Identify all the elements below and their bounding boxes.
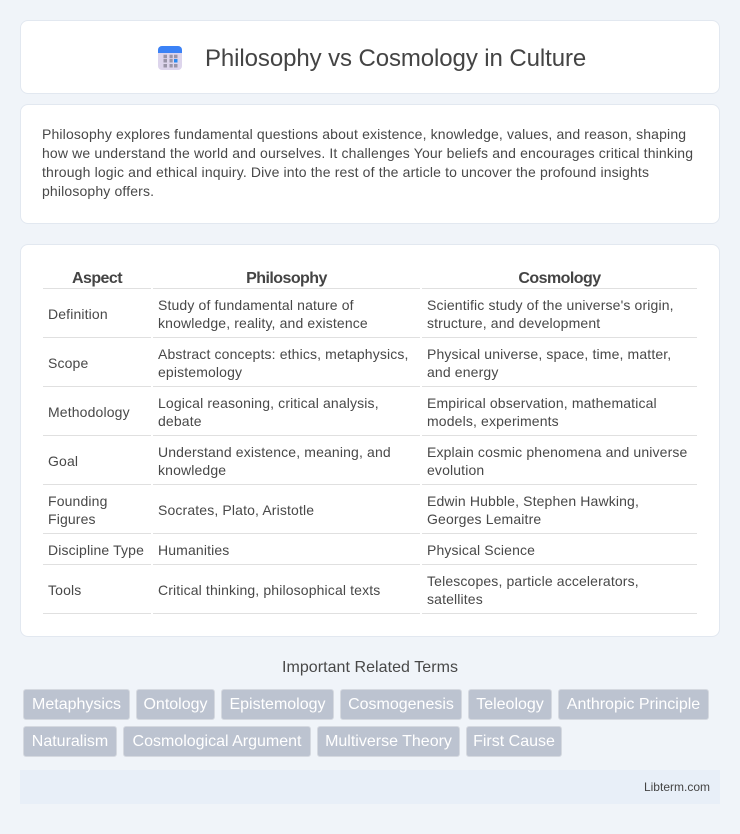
row: Tools: Tools	[48, 582, 81, 598]
tag: Cosmogenesis: Cosmogenesis	[348, 696, 454, 713]
table card	[20, 244, 720, 637]
row: Methodology: Methodology	[48, 404, 130, 420]
tag: First Cause: First Cause	[473, 733, 555, 750]
tag: Naturalism	[23, 726, 117, 757]
table header row: Philosophy	[246, 270, 327, 287]
tag: Epistemology	[221, 689, 334, 720]
row: Founding Figures: Georges Lemaitre	[427, 511, 541, 527]
comparison table	[43, 270, 697, 614]
table header row	[43, 270, 697, 289]
row: Methodology: Logical reasoning, critical analysis,	[158, 395, 379, 411]
header card	[20, 20, 720, 94]
tag: Ontology: Ontology	[143, 696, 208, 713]
row: Methodology	[43, 395, 697, 436]
tag: Ontology	[136, 689, 215, 720]
tag: Epistemology: Epistemology	[229, 696, 326, 713]
intro card	[20, 104, 720, 224]
row: Goal: evolution	[427, 462, 484, 478]
row: Tools	[43, 573, 697, 614]
intro text	[42, 126, 693, 199]
tag: Cosmological Argument	[123, 726, 311, 757]
tag: Metaphysics	[23, 689, 130, 720]
row: Scope: Abstract concepts: ethics, metaphysics,	[158, 346, 409, 362]
row: Methodology: models, experiments	[427, 413, 559, 429]
table header row: Aspect	[72, 270, 122, 287]
tag: Anthropic Principle	[558, 689, 709, 720]
intro text: Philosophy explores fundamental questions about existence, knowledge, values, and reason, shaping	[42, 126, 686, 142]
row: Founding Figures: Edwin Hubble, Stephen Hawking,	[427, 493, 639, 509]
row: Founding Figures: Figures	[48, 511, 96, 527]
row: Founding Figures	[43, 493, 697, 534]
row: Methodology: debate	[158, 413, 202, 429]
footer bar	[20, 770, 720, 804]
row: Definition: Study of fundamental nature of	[158, 297, 354, 313]
tag: Teleology: Teleology	[476, 696, 544, 713]
row: Discipline Type: Discipline Type	[48, 542, 144, 558]
tag: Cosmological Argument: Cosmological Argument	[133, 733, 301, 750]
intro text: how we understand the world and ourselves. It challenges Your beliefs and encourages critical thinking	[42, 145, 693, 161]
related terms heading: Important Related Terms	[282, 659, 458, 676]
footer credit: Libterm.com	[644, 780, 710, 794]
row: Tools: Critical thinking, philosophical texts	[158, 582, 380, 598]
row: Discipline Type: Physical Science	[427, 542, 535, 558]
row: Goal: Explain cosmic phenomena and universe	[427, 444, 687, 460]
table header row: Cosmology	[518, 270, 601, 287]
row: Goal: Understand existence, meaning, and	[158, 444, 391, 460]
row: Definition: structure, and development	[427, 315, 600, 331]
row: Founding Figures: Founding	[48, 493, 108, 509]
tag: Multiverse Theory: Multiverse Theory	[325, 733, 452, 750]
row: Methodology: Empirical observation, mathematical	[427, 395, 657, 411]
tag: First Cause	[466, 726, 562, 757]
row: Scope: Physical universe, space, time, matter,	[427, 346, 671, 362]
row: Scope: epistemology	[158, 364, 242, 380]
tag: Metaphysics: Metaphysics	[32, 696, 121, 713]
tag: Multiverse Theory	[317, 726, 460, 757]
icon: calendar	[158, 46, 182, 70]
title: Philosophy vs Cosmology in Culture	[205, 45, 586, 72]
row: Scope	[43, 346, 697, 387]
row: Definition: Scientific study of the universe's origin,	[427, 297, 674, 313]
row: Goal: knowledge	[158, 462, 226, 478]
row: Discipline Type	[43, 542, 697, 565]
row: Definition: knowledge, reality, and existence	[158, 315, 368, 331]
intro text: through logic and ethical inquiry. Dive into the rest of the article to uncover the profound insights	[42, 164, 649, 180]
tag: Teleology	[468, 689, 552, 720]
row: Goal	[43, 444, 697, 485]
tag: Cosmogenesis	[340, 689, 462, 720]
row: Tools: Telescopes, particle accelerators,	[427, 573, 639, 589]
row: Definition: Definition	[48, 306, 108, 322]
row: Scope: and energy	[427, 364, 498, 380]
tags: related terms	[23, 689, 709, 757]
row: Goal: Goal	[48, 453, 78, 469]
intro text: philosophy offers.	[42, 183, 154, 199]
row: Tools: satellites	[427, 591, 483, 607]
row: Founding Figures: Socrates, Plato, Aristotle	[158, 502, 314, 518]
row: Discipline Type: Humanities	[158, 542, 229, 558]
tag: Anthropic Principle: Anthropic Principle	[567, 696, 700, 713]
row: Definition	[43, 297, 697, 338]
tag: Naturalism: Naturalism	[32, 733, 108, 750]
row: Scope: Scope	[48, 355, 88, 371]
